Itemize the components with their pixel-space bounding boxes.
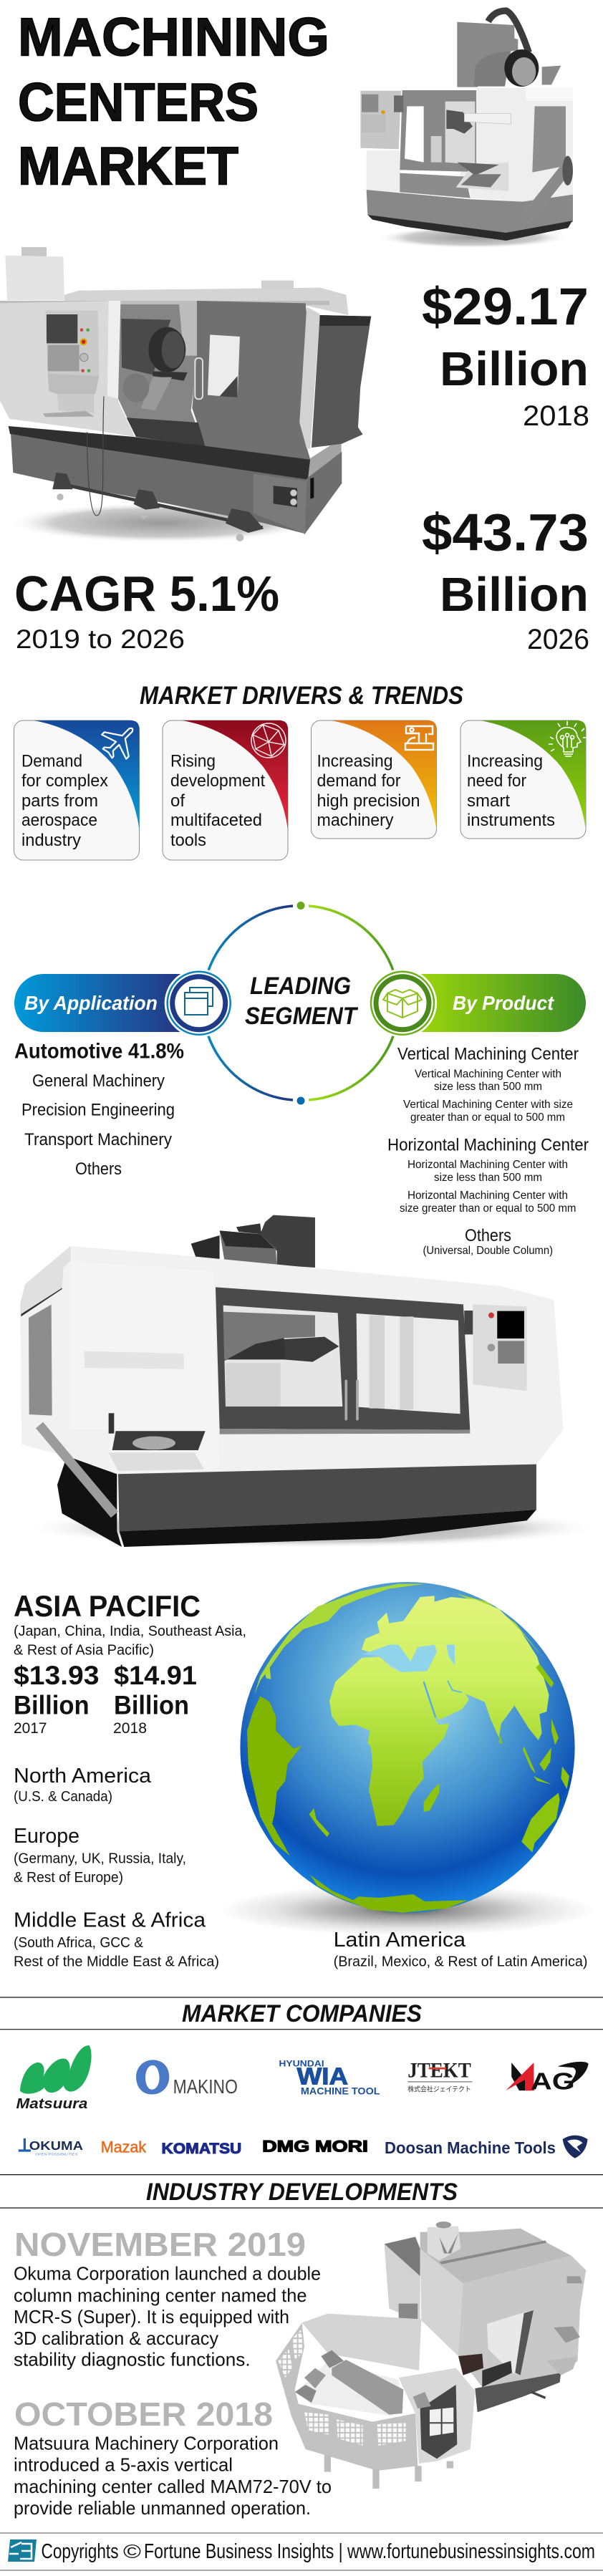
panel: driver aerospace: industry <box>21 831 81 850</box>
logo: MAG <box>506 2062 589 2095</box>
panel: driver high precision machinery <box>311 720 437 839</box>
stat: 2018 market size: 2018 <box>523 400 589 432</box>
title: MARKET <box>18 136 238 196</box>
logo: MAG: AG <box>531 2069 575 2095</box>
logo: Doosan Machine Tools: Doosan Machine Tools <box>385 2138 556 2157</box>
logo: Hyundai WIA: WIA <box>297 2064 348 2090</box>
heading: market companies <box>0 1997 603 2030</box>
text block: by application list: Precision Engineering <box>21 1101 175 1120</box>
footer: Copyrights <box>42 2540 119 2563</box>
panel: by product pill: By Product <box>453 992 555 1014</box>
text block: November 2019 development: MCR-S (Super). It is equipped with <box>14 2306 289 2327</box>
text block: Asia Pacific <box>14 1589 246 1737</box>
text block: Asia Pacific: Billion <box>114 1690 189 1720</box>
text block: North America: North America <box>14 1765 152 1788</box>
text block: Asia Pacific: 2017 <box>14 1720 47 1737</box>
text block: by product list: (Universal, Double Column) <box>423 1245 553 1257</box>
panel: driver multifaceted tools: development <box>170 771 265 791</box>
text block: North America: (U.S. & Canada) <box>14 1789 112 1805</box>
logo: Mazak: Mazak <box>101 2138 147 2156</box>
panel: driver multifaceted tools: tools <box>170 831 206 850</box>
text block: by product list: size less than 500 mm <box>434 1172 542 1184</box>
text block: North America <box>14 1765 152 1805</box>
text block: October 2018 development: Matsuura Machinery Corporation <box>14 2433 279 2454</box>
footer: © <box>123 2541 141 2562</box>
text block: October 2018 development <box>14 2396 332 2519</box>
heading: industry developments <box>0 2175 603 2208</box>
panel: by application pill <box>14 969 233 1038</box>
logo: DMG Mori: DMG MORI <box>262 2138 368 2156</box>
stat: 2026 market size <box>422 503 589 655</box>
text block: Latin America <box>334 1929 587 1970</box>
text block: by product list: Others <box>465 1226 511 1245</box>
stat: CAGR: 2019 to 2026 <box>16 624 185 654</box>
panel: driver high precision machinery: demand for <box>317 771 401 791</box>
stat: 2018 market size: $29.17 <box>422 278 589 336</box>
logo: Hyundai WIA: MACHINE TOOL <box>301 2085 380 2096</box>
stat: 2018 market size <box>422 278 589 432</box>
panel: driver smart instruments: smart <box>467 791 510 811</box>
text block: Latin America: Latin America <box>334 1929 466 1952</box>
heading: market companies: MARKET COMPANIES <box>182 2000 422 2027</box>
illustration: machining center with pallet changer <box>276 2222 586 2489</box>
logo: Okuma: OPEN POSSIBILITIES <box>35 2152 78 2156</box>
stat: CAGR <box>14 566 279 654</box>
text block: October 2018 development: introduced a 5-axis vertical <box>14 2454 233 2475</box>
text block: October 2018 development: provide reliable unmanned operation. <box>14 2497 311 2519</box>
heading: leading segment: LEADING <box>250 973 351 1000</box>
panel: driver smart instruments: Increasing <box>467 752 543 771</box>
text block: Europe: & Rest of Europe) <box>14 1870 123 1886</box>
title: CENTERS <box>18 72 259 132</box>
text block: October 2018 development: OCTOBER 2018 <box>14 2396 273 2433</box>
heading: leading segment <box>245 973 359 1030</box>
panel: leading segment ring <box>208 902 394 1104</box>
text block: Asia Pacific: 2018 <box>113 1720 147 1737</box>
logo: Matsuura <box>16 2045 92 2112</box>
panel: driver multifaceted tools <box>163 720 288 860</box>
panel: driver aerospace: parts from <box>21 791 98 811</box>
text block: November 2019 development: 3D calibration & accuracy <box>14 2327 218 2349</box>
stat: 2026 market size: 2026 <box>527 624 589 655</box>
text block: Asia Pacific: $13.93 <box>14 1661 99 1690</box>
text block: by product list: Vertical Machining Center <box>397 1045 579 1064</box>
panel: driver aerospace: aerospace <box>21 811 97 830</box>
panel: driver multifaceted tools: multifaceted <box>170 811 262 830</box>
text block: November 2019 development: Okuma Corporation launched a double <box>14 2263 321 2285</box>
text block: by application list: Transport Machinery <box>24 1130 172 1149</box>
logo: JTEKT: 株式会社ジェイテクト <box>407 2084 471 2094</box>
logo: Makino: MAKINO <box>173 2075 238 2098</box>
text block: by product list: greater than or equal to 500 mm <box>410 1111 565 1124</box>
text block: November 2019 development: NOVEMBER 2019 <box>14 2226 306 2263</box>
logo: Hyundai WIA: HYUNDAI <box>279 2060 324 2068</box>
text block: November 2019 development: column machining center named the <box>14 2285 307 2306</box>
panel: driver high precision machinery: Increasing <box>317 752 392 771</box>
stat: 2026 market size: $43.73 <box>422 503 589 561</box>
illustration: CNC lathe <box>0 247 371 543</box>
text block: Europe: Europe <box>14 1825 79 1848</box>
panel: driver smart instruments <box>460 720 586 839</box>
panel: by product pill <box>368 969 586 1038</box>
panel: driver multifaceted tools: Rising <box>170 752 216 771</box>
title: MACHINING <box>18 7 329 67</box>
text block: Middle East and Africa: Middle East & Africa <box>14 1909 206 1932</box>
text block: November 2019 development: stability diagnostic functions. <box>14 2349 251 2370</box>
text block: by product list: Vertical Machining Center with <box>415 1068 561 1080</box>
illustration: globe <box>220 1582 595 1936</box>
logo: Matsuura: Matsuura <box>16 2096 87 2112</box>
stat: 2018 market size: Billion <box>440 342 589 396</box>
panel: driver aerospace: for complex <box>21 771 108 791</box>
panel: by application pill: By Application <box>24 992 158 1014</box>
text block: Middle East and Africa <box>14 1909 219 1970</box>
text block: by product list: Horizontal Machining Center with <box>407 1159 568 1171</box>
text block: Asia Pacific: & Rest of Asia Pacific) <box>14 1643 154 1659</box>
text block: by application list <box>14 1039 184 1179</box>
panel: driver aerospace: Demand <box>21 752 82 771</box>
text block: Middle East and Africa: Rest of the Middle East & Africa) <box>14 1954 219 1970</box>
panel: driver high precision machinery: high precision <box>317 791 420 811</box>
illustration: large vertical machining center <box>20 1215 599 1548</box>
heading: market drivers and trends: MARKET DRIVERS & TRENDS <box>140 682 463 710</box>
panel: driver high precision machinery: machinery <box>317 811 394 830</box>
logo: Makino <box>136 2060 238 2098</box>
logo: Komatsu: KOMATSU <box>162 2140 241 2157</box>
text block: October 2018 development: machining center called MAM72-70V to <box>14 2476 332 2497</box>
logo: JTEKT <box>407 2059 472 2094</box>
title <box>18 7 329 196</box>
text block: by application list: General Machinery <box>32 1071 165 1091</box>
text block: Asia Pacific: ASIA PACIFIC <box>14 1589 201 1623</box>
logo: Okuma: OKUMA <box>29 2138 83 2153</box>
stat: CAGR: CAGR 5.1% <box>14 566 279 622</box>
text block: by product list: Horizontal Machining Center <box>387 1135 589 1154</box>
panel: driver aerospace <box>14 716 145 860</box>
text block: Europe <box>14 1825 186 1886</box>
footer <box>0 2533 603 2570</box>
panel: driver multifaceted tools: of <box>170 791 185 811</box>
illustration: vertical machining center <box>360 11 573 249</box>
heading: leading segment: SEGMENT <box>245 1003 359 1030</box>
logo: JTEKT: JTEKT <box>407 2059 471 2082</box>
text block: Asia Pacific: Billion <box>14 1690 90 1720</box>
text block: Europe: (Germany, UK, Russia, Italy, <box>14 1851 186 1867</box>
text block: Latin America: (Brazil, Mexico, & Rest of Latin America) <box>334 1954 587 1970</box>
text block: by product list: size less than 500 mm <box>434 1081 542 1093</box>
text block: Middle East and Africa: (South Africa, GCC & <box>14 1935 144 1951</box>
stat: 2026 market size: Billion <box>440 568 589 622</box>
text block: November 2019 development <box>14 2226 321 2370</box>
text block: Asia Pacific: $14.91 <box>114 1661 197 1690</box>
panel: company logos <box>16 2045 589 2158</box>
logo: Hyundai WIA <box>279 2060 380 2096</box>
text block: by product list: size greater than or equal to 500 mm <box>400 1202 576 1215</box>
text block: Asia Pacific: (Japan, China, India, Southeast Asia, <box>14 1624 246 1639</box>
panel: driver smart instruments: need for <box>467 771 526 791</box>
text block: by product list: Horizontal Machining Center with <box>407 1190 568 1202</box>
text block: by product list: Vertical Machining Center with size <box>403 1099 573 1111</box>
panel: driver smart instruments: instruments <box>467 811 555 830</box>
text block: by application list: Others <box>75 1159 122 1179</box>
text block: by application list: Automotive 41.8% <box>14 1039 184 1063</box>
logo: Okuma <box>19 2138 83 2156</box>
heading: industry developments: INDUSTRY DEVELOPMENTS <box>146 2179 458 2206</box>
text block: by product list <box>387 1045 589 1257</box>
